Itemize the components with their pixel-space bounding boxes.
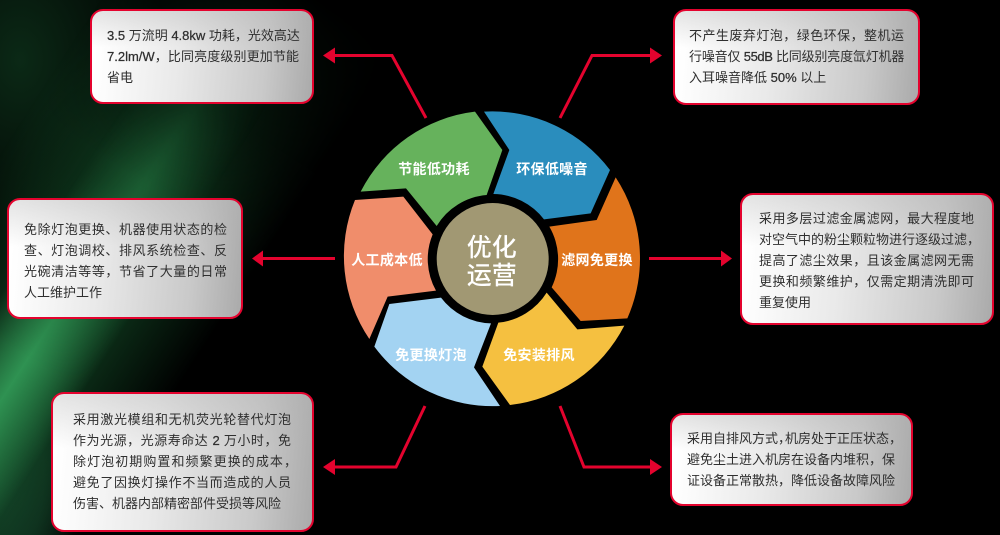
text: filter: 更换和频繁维护，仅需定期清洗即可 [759, 274, 974, 289]
text: low noise [689, 28, 904, 85]
center title: 优化 [467, 234, 517, 262]
text: filter: 对空气中的粉尘颗粒物进行逐级过滤， [759, 232, 974, 247]
text: self exhaust: 证设备正常散热，降低设备故障风险 [687, 473, 895, 488]
text: filter [759, 211, 974, 310]
segment: green [361, 112, 502, 226]
segment: orange [549, 177, 640, 321]
label: energy: 节能低功耗 [398, 161, 470, 177]
panel: self exhaust [670, 413, 913, 506]
text: energy saving: 7.2lm/W，比同亮度级别更加节能 [107, 49, 299, 64]
segment: light blue [374, 298, 500, 406]
text: labor cost: 查、灯泡调校、排风系统检查、反 [24, 243, 227, 258]
text: energy saving [107, 28, 300, 85]
text: labor cost [24, 222, 227, 300]
center title line two: 运营 [467, 262, 517, 290]
panel: energy saving [90, 9, 314, 104]
panel: labor cost [7, 198, 243, 319]
label: labor cost: 人工成本低 [351, 252, 423, 268]
text: filter: 提高了滤尘效果，且该金属滤网无需 [759, 253, 974, 268]
text: energy saving: 3.5 万流明 4.8kw 功耗，光效高达 [107, 28, 300, 43]
text: labor cost: 免除灯泡更换、机器使用状态的检 [24, 222, 227, 237]
label: filter: 滤网免更换 [561, 252, 633, 268]
text: lamp replacement: 除灯泡初期购置和频繁更换的成本， [73, 454, 291, 469]
text: self exhaust: 采用自排风方式，机房处于正压状态， [687, 431, 896, 446]
segment: blue [484, 111, 610, 219]
text: labor cost: 人工维护工作 [24, 285, 102, 300]
panel: lamp replacement [51, 392, 314, 532]
label: no lamp change: 免更换灯泡 [395, 347, 467, 363]
segment: yellow [482, 293, 624, 405]
text: labor cost: 光碗清洁等等，节省了大量的日常 [24, 264, 227, 279]
panel: low noise [673, 9, 920, 105]
text: energy saving: 省电 [107, 70, 133, 85]
text: lamp replacement: 采用激光模组和无机荧光轮替代灯泡 [73, 412, 291, 427]
label: no exhaust: 免安装排风 [503, 347, 575, 363]
text: low noise: 不产生废弃灯泡，绿色环保，整机运 [689, 28, 904, 43]
text: self exhaust [687, 431, 896, 488]
background with green light streaks [0, 0, 302, 535]
text: self exhaust: 避免尘土进入机房在设备内堆积，保 [687, 452, 895, 467]
text: lamp replacement [73, 412, 291, 511]
text: lamp replacement: 伤害、机器内部精密部件受损等风险 [73, 496, 281, 511]
text: filter: 重复使用 [759, 295, 811, 310]
text: lamp replacement: 作为光源，光源寿命达 2 万小时，免 [73, 433, 291, 448]
segment: salmon [344, 197, 436, 339]
text: lamp replacement: 避免了因换灯操作不当而造成的人员 [73, 475, 291, 490]
text: filter: 采用多层过滤金属滤网，最大程度地 [759, 211, 974, 226]
label: noise: 环保低噪音 [516, 161, 588, 177]
text: low noise: 行噪音仅 55dB 比同级别亮度氙灯机器 [689, 49, 904, 64]
text: low noise: 入耳噪音降低 50% 以上 [689, 70, 826, 85]
center circle [437, 203, 549, 315]
panel: filter [740, 193, 994, 325]
